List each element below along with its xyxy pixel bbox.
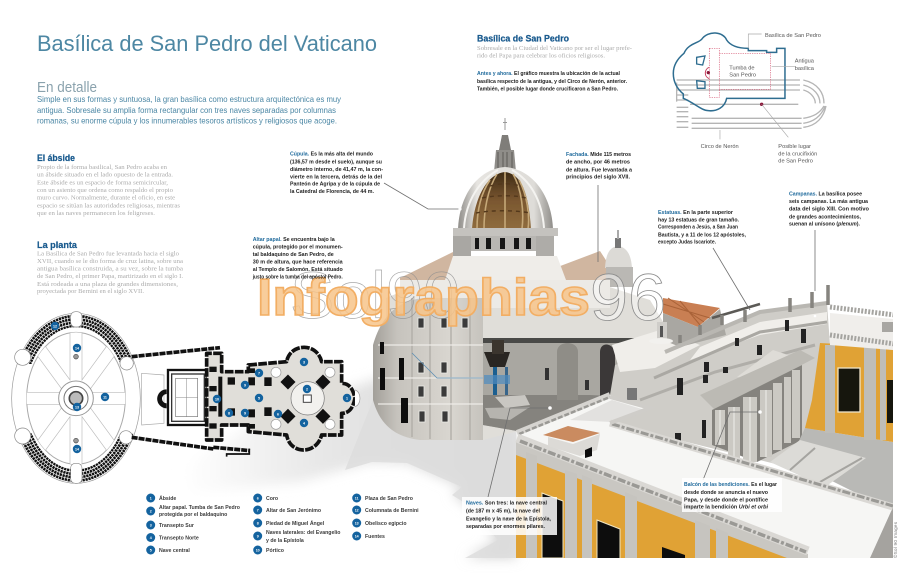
text block: el ábside: que en las naves permanecen los feligreses. [37, 210, 156, 217]
callout: campanas: data del siglo XIII. Con motivo [789, 207, 870, 213]
plan number markers: 7 [258, 371, 260, 375]
text block: basílica de san pedro: basílica respecto de la antigua, y del Circo de Nerón, anterior. [477, 79, 627, 85]
legend: Coro [266, 496, 278, 502]
leader dots [458, 207, 816, 414]
callout: fachada [566, 152, 633, 181]
plan number markers: 1 [346, 396, 348, 400]
legend: 1 [150, 496, 152, 500]
legend: 3 [150, 523, 152, 527]
callout: naves: (de 187 m x 45 m), la nave del [466, 508, 540, 514]
callout: estatuas: excepto Judas Iscariote. [658, 240, 716, 246]
colonnade [14, 316, 138, 481]
legend: Altar papal. Tumba de San Pedro [159, 505, 240, 511]
callout: altar papal: tal baldaquino de San Pedro, de [253, 252, 334, 258]
apse block [373, 298, 483, 440]
callout: cúpula: Cúpula. Es la más alta del mundo [290, 152, 374, 158]
legend: 4 [150, 536, 152, 540]
legend: Piedad de Miguel Ángel [266, 520, 325, 527]
plan number markers: 6 [277, 412, 279, 416]
map leaders [720, 34, 795, 139]
legend: 5 [150, 548, 152, 552]
plan number markers: 9 [244, 383, 246, 387]
legend: Pórtico [266, 548, 284, 554]
intro: en detalle [37, 79, 342, 126]
legend: 14 [355, 534, 359, 538]
callout: estatuas: Corresponden a Jesús, a San Juan [658, 225, 739, 231]
text block: el ábside: El ábside [37, 153, 75, 164]
callout: naves [462, 497, 557, 535]
text block: el ábside: un ábside situado en el lado opuesto de la entrada. [37, 173, 174, 179]
colonnade pavilions [15, 312, 133, 483]
map labels [701, 33, 821, 165]
callout: balcón de las bendiciones: desde donde se anuncia el nuevo [684, 490, 769, 496]
plan number markers: 14 [75, 346, 79, 350]
callout: estatuas [658, 210, 746, 246]
plan number markers: 10 [215, 397, 219, 401]
dome [458, 167, 553, 230]
upper facade with roof [610, 285, 830, 470]
intro: en detalle: Simple en sus formas y suntuosa, la gran basílica como estructura arquitectónica es muy [37, 94, 342, 104]
callout: campanas: suenan al unísono (plenum). [789, 222, 860, 228]
text block: el ábside: muro curvo. Normalmente, durante el oficio, en este [37, 195, 175, 202]
map labels: San Pedro [729, 73, 756, 79]
ground shadow [183, 378, 516, 558]
piazza retta [142, 370, 207, 425]
callout: altar papal: justo sobre la tumba del apóstol Pedro. [252, 274, 343, 280]
basilica outline [673, 33, 785, 111]
legend: Nave central [159, 548, 190, 554]
map labels: Posible lugar [778, 144, 811, 150]
callout: cúpula: Panteón de Agripa y de la cúpula de [290, 182, 380, 188]
plan number markers: 8 [228, 411, 230, 415]
text block: basílica de san pedro: Basílica de San Pedro [477, 34, 569, 45]
title: Basílica de San Pedro del Vaticano [37, 31, 377, 56]
rear roof and small dome [400, 230, 633, 287]
callout: campanas [789, 192, 870, 228]
callout: balcón de las bendiciones: Balcón de las bendiciones. Es el lugar [684, 482, 778, 488]
plan number markers: 13 [75, 405, 79, 409]
map labels: de la crucifixión [778, 151, 817, 157]
legend: 8 [257, 521, 259, 525]
plan number markers: 14 [75, 447, 79, 451]
front facade yellow [516, 442, 893, 566]
plan number markers: 4 [303, 421, 305, 425]
plan number markers: 3 [303, 360, 305, 364]
callout: campanas: de grandes acontecimientos, [789, 214, 861, 220]
callout: estatuas: Bautista, y a 11 de los 12 apóstoles, [658, 232, 746, 238]
callout: balcón de las bendiciones: imparte la bendición Urbi et orbi [684, 505, 768, 511]
right yellow building [805, 343, 893, 442]
text block: el ábside: espacio se sitúan las autoridades religiosas, mientras [37, 203, 181, 209]
watermark: 96 [590, 260, 666, 334]
old basilica [709, 48, 771, 97]
legend: Altar de San Jerónimo [266, 508, 321, 514]
callout: campanas: Campanas. La basílica posee [789, 192, 862, 198]
callout: fachada: principios del siglo XVII. [566, 175, 630, 181]
legend: 2 [150, 509, 152, 513]
watermark: Sol90 [290, 258, 460, 332]
map labels: Tumba de [729, 65, 755, 71]
text block: la planta [37, 240, 184, 295]
plan number markers: 12 [53, 324, 57, 328]
image credit: ©Sol 90 Images [892, 521, 898, 558]
legend: 7 [257, 508, 259, 512]
callout: altar papal: Altar papal. Se encuentra bajo la [253, 237, 336, 243]
legend: 11 [355, 496, 359, 500]
text block: la planta: La Basílica de San Pedro fue levantada hacia el siglo [37, 250, 179, 258]
callout: naves: Evangelio y la nave de la Epístola, [466, 516, 551, 522]
callout: estatuas: Estatuas. En la parte superior [658, 210, 734, 216]
callout: altar papal [252, 237, 344, 280]
callout: campanas: seis campanas. La más antigua [789, 199, 869, 205]
callout: cúpula: vierte en la tercera, detrás de la del [290, 174, 382, 180]
locator map [673, 33, 826, 165]
legend: 13 [355, 521, 359, 525]
map labels: Basílica de San Pedro [765, 33, 821, 39]
text block: basílica de san pedro: Sobresale en la Ciudad del Vaticano por ser el lugar prefe- [477, 45, 632, 52]
callout: cúpula [290, 152, 383, 195]
callout: estatuas: hay 13 estatuas de gran tamaño. [658, 218, 739, 224]
legend: Ábside [159, 495, 176, 502]
ground plane near building [345, 395, 516, 558]
interior cutaway [483, 338, 640, 431]
text block: el ábside [37, 153, 181, 217]
text block: la planta: proyectada por Bernini en el siglo XVII. [37, 289, 145, 295]
text block: basílica de san pedro: También, el posible lugar donde crucificaron a San Pedro. [477, 86, 618, 92]
circus of nero [677, 80, 826, 128]
callout: fachada: de altura. Fue levantada a [566, 167, 633, 173]
intro: en detalle: En detalle [37, 79, 97, 96]
portico columns and pediment [700, 350, 815, 462]
callout: fachada: de ancho, por 46 metros [566, 160, 630, 166]
text block: el ábside: Propio de la forma basilical, San Pedro acaba en [37, 164, 167, 171]
legend: Naves laterales: del Evangelio [266, 530, 340, 536]
legend: Obelisco egipcio [365, 521, 407, 527]
text block: la planta: Está rodeada a una plaza de grandes dimensiones, [37, 282, 179, 288]
text block: el ábside: con un asiento que ordena como respaldo el propio [37, 188, 173, 194]
plaza ellipse [12, 313, 140, 483]
callout: cúpula: la Catedral de Florencia, de 44 m. [290, 189, 374, 195]
plan number markers: 9 [244, 411, 246, 415]
right courtyard [770, 428, 893, 510]
plan number markers: 2 [306, 387, 308, 391]
right rooftop balustrades [830, 307, 895, 350]
text block: la planta: La planta [37, 240, 78, 251]
intro: en detalle: romanas, su enorme cúpula y los innumerables tesoros artísticos y religiosos que acoge. [37, 116, 337, 126]
building illustration [373, 118, 895, 566]
text block: basílica de san pedro: Antes y ahora. El gráfico muestra la ubicación de la actual [477, 71, 620, 77]
intro: en detalle: antigua. Sobresale su amplia forma rectangular con tres naves separadas por columnas [37, 105, 337, 115]
callout: naves: separadas por enormes pilares. [466, 524, 545, 530]
callout: cúpula: diámetro interno, de 41,47 m, la con- [290, 167, 383, 173]
callout: balcón de las bendiciones: Papa, y desde donde el pontífice [684, 497, 768, 503]
rooftop hut [543, 426, 600, 458]
legend [146, 494, 419, 554]
callout: naves: Naves. Son tres: la nave central [466, 501, 547, 507]
dome drum [400, 228, 610, 308]
legend: 6 [257, 496, 259, 500]
callout: altar papal: 30 m de altura, que hace referencia [253, 259, 344, 265]
text block: la planta: de San Pedro, el primer Papa, martirizado en el siglo I. [37, 274, 184, 280]
basilica [207, 347, 360, 450]
callout: altar papal: al Templo de Salomón. Está situado [253, 267, 343, 273]
callout: fachada: Fachada. Mide 115 metros [566, 152, 631, 158]
callout: altar papal: cúpula, protegido por el monumen- [253, 245, 343, 251]
legend: 9 [257, 534, 259, 538]
text block: la planta: XVII, cuando se le dio forma de cruz latina, sobre una [37, 258, 183, 265]
legend: Transepto Norte [159, 536, 199, 542]
watermark [257, 258, 666, 334]
corridors [132, 348, 250, 451]
legend: protegida por el baldaquino [159, 512, 227, 518]
front terrace [517, 395, 893, 558]
map labels: de San Pedro [778, 159, 813, 165]
text block: el ábside: Este ábside es un espacio de forma semicircular, [37, 179, 169, 186]
legend: 10 [256, 548, 260, 552]
callout: balcón de las bendiciones [682, 478, 782, 512]
legend: Plaza de San Pedro [365, 496, 413, 502]
map labels: Circo de Nerón [701, 144, 739, 150]
callout: cúpula: (136,57 m desde el suelo), aunque su [290, 159, 382, 165]
legend: y de la Epístola [266, 538, 304, 544]
legend: Transepto Sur [159, 523, 194, 529]
map labels: basílica [795, 66, 815, 72]
plan number markers [51, 322, 351, 453]
text block: la planta: antigua basílica construida, a su vez, sobre la tumba [37, 267, 183, 273]
lantern [494, 118, 516, 172]
text block: basílica de san pedro: rido del Papa para celebrar los oficios religiosos. [477, 52, 606, 60]
floor plan [12, 312, 360, 483]
legend: Columnata de Bernini [365, 508, 419, 514]
plan number markers: 11 [103, 395, 107, 399]
map labels: Antigua [795, 59, 815, 65]
watermark: Infographias [257, 269, 590, 327]
legend: Fuentes [365, 534, 385, 540]
legend: 12 [355, 508, 359, 512]
balustrades [517, 395, 893, 552]
leader lines [384, 183, 815, 497]
plan number markers: 5 [258, 396, 260, 400]
text block: basílica de san pedro [477, 34, 632, 92]
main body [390, 287, 663, 432]
